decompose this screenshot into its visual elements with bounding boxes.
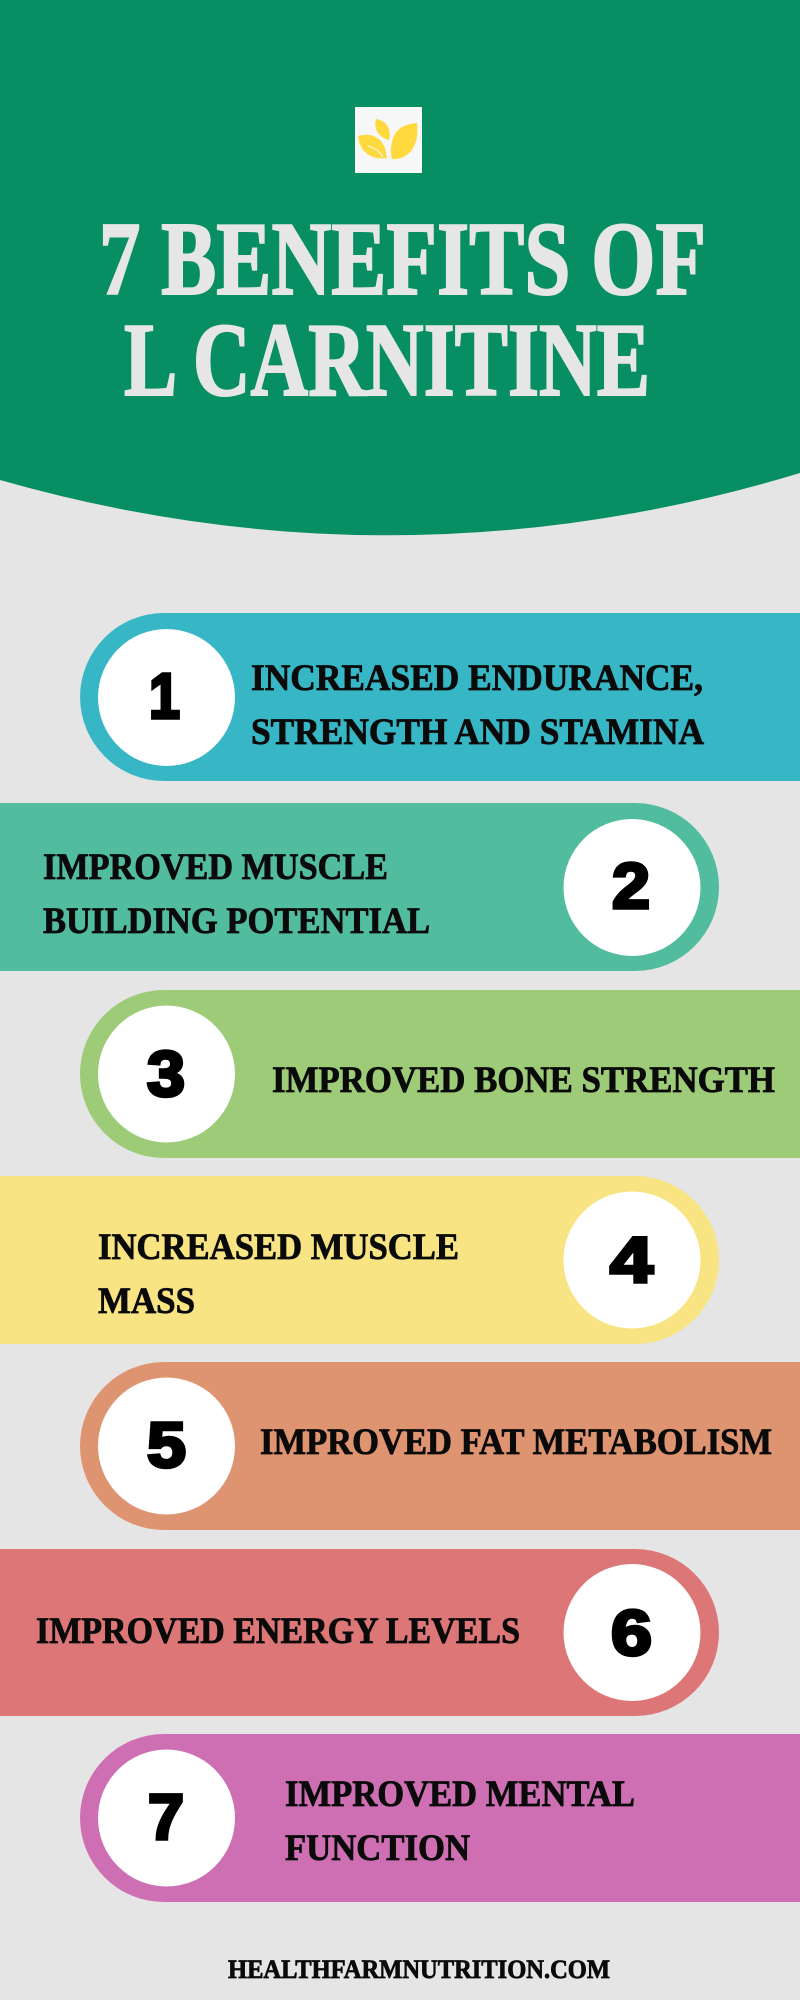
panel: benefit 2	[0, 803, 719, 971]
panel: benefit 7: FUNCTION	[285, 1828, 470, 1869]
panel: benefit 1	[80, 613, 800, 781]
panel: benefit 3: 3	[147, 1038, 185, 1110]
panel: benefit 1: 1	[149, 660, 180, 732]
panel: benefit 3: IMPROVED BONE STRENGTH	[272, 1060, 775, 1101]
panel: benefit 2: IMPROVED MUSCLE	[43, 847, 388, 888]
title: L CARNITINE	[124, 301, 650, 418]
footer: website: HEALTHFARMNUTRITION.COM	[228, 1955, 610, 1984]
header: green curved banner	[0, 0, 800, 535]
panel: benefit 6	[0, 1549, 719, 1716]
panel: benefit 7: IMPROVED MENTAL	[285, 1774, 635, 1815]
panel: benefit 6: 6	[611, 1597, 652, 1669]
panel: benefit 5	[80, 1362, 800, 1530]
panel: benefit 5: 5	[147, 1409, 186, 1481]
panel: benefit 3	[80, 990, 800, 1158]
panel: benefit 1: STRENGTH AND STAMINA	[251, 712, 704, 753]
panel: benefit 7	[80, 1734, 800, 1902]
panel: benefit 7: 7	[148, 1781, 184, 1853]
panel: benefit 4: INCREASED MUSCLE	[98, 1227, 459, 1268]
panel: benefit 1: INCREASED ENDURANCE,	[251, 658, 703, 699]
panel: benefit 5: IMPROVED FAT METABOLISM	[260, 1422, 772, 1463]
panel: benefit 4: MASS	[98, 1281, 195, 1322]
panel: benefit 2: 2	[612, 850, 650, 922]
title	[99, 200, 706, 418]
panel: benefit 4: 4	[610, 1224, 653, 1296]
icon: yellow leaves logo	[355, 107, 422, 173]
panel: benefit 4	[0, 1176, 719, 1344]
panel: benefit 6: IMPROVED ENERGY LEVELS	[36, 1611, 520, 1652]
panel: benefit 2: BUILDING POTENTIAL	[43, 901, 430, 942]
